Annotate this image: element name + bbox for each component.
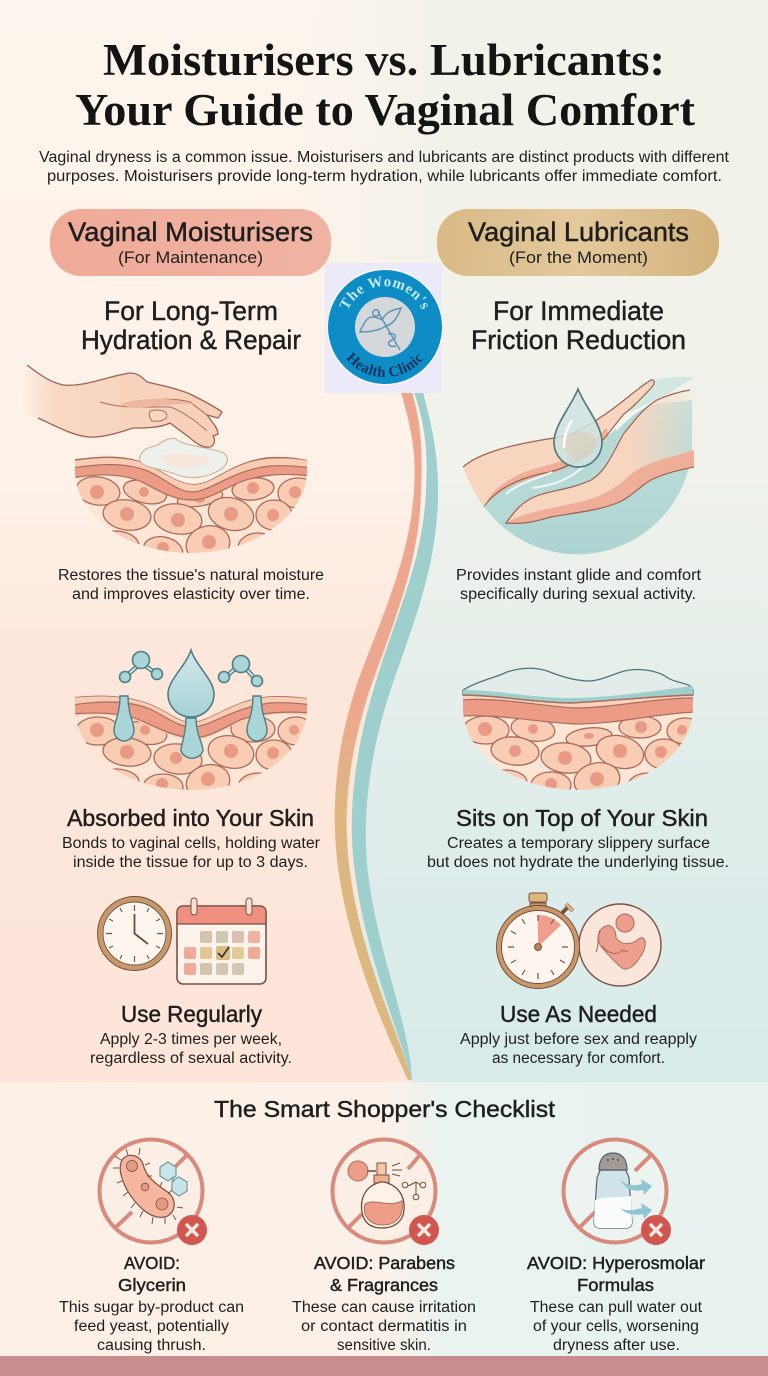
text: absorbed into your skin: inside the tissue for up to 3 days. [73, 854, 308, 871]
central ribbon: coral to gold [335, 392, 422, 1080]
logo: the women's health clinic [325, 263, 444, 393]
text: avoid glycerin [59, 1253, 244, 1354]
text: avoid parabens: & Fragrances [330, 1275, 438, 1295]
text: use as needed: Apply just before sex and reapply [460, 1031, 697, 1048]
text: sits on top of your skin: Sits on Top of Your Skin [456, 805, 708, 831]
intro text: Vaginal dryness is a common issue. Moisturisers and lubricants are distinct products with different [39, 149, 730, 166]
text: avoid hyperosmolar: Formulas [577, 1275, 654, 1295]
panel: moisturisers column [20, 209, 331, 1067]
text: avoid hyperosmolar [527, 1253, 705, 1354]
text: use regularly: regardless of sexual activity. [90, 1050, 292, 1067]
text: absorbed into your skin: Bonds to vaginal cells, holding water [62, 835, 320, 852]
text: sits on top of your skin: but does not hydrate the underlying tissue. [427, 854, 729, 871]
illustration: hand applying cream on skin [26, 364, 307, 553]
text: avoid hyperosmolar: These can pull water out [530, 1299, 703, 1316]
text: use as needed: as necessary for comfort. [492, 1050, 665, 1067]
checklist heading: The Smart Shopper's Checklist [214, 1096, 555, 1122]
lubricant film [463, 668, 693, 703]
text: avoid hyperosmolar: dryness after use. [553, 1337, 680, 1354]
text: avoid parabens: sensitive skin. [337, 1337, 431, 1354]
text: avoid glycerin: Glycerin [118, 1275, 186, 1295]
icon: clock [98, 896, 172, 970]
icon: calendar [177, 898, 266, 984]
text: use as needed [460, 1001, 697, 1067]
logo: the women's health clinic: Health Clinic [346, 352, 424, 378]
text: sits on top of your skin [427, 805, 729, 871]
caption: instant glide [456, 567, 702, 603]
central ribbon: teal [352, 392, 438, 1080]
illustration: lubricant film on top of skin [462, 668, 694, 790]
logo: the women's health clinic: The Women's [339, 276, 428, 310]
heading pill: vaginal moisturisers: (For Maintenance) [118, 249, 263, 267]
subheading: immediate friction reduction: For Immediate [493, 296, 664, 326]
icon: avoid glycerin [100, 1140, 207, 1245]
intro text: purposes. Moisturisers provide long-term hydration, while lubricants offer immediate comfort. [47, 168, 722, 185]
subheading: long-term hydration: Hydration & Repair [81, 325, 301, 355]
text: absorbed into your skin [62, 805, 320, 871]
title: Your Guide to Vaginal Comfort [75, 85, 695, 135]
hand [20, 365, 222, 447]
text: avoid glycerin: causing thrush. [97, 1337, 206, 1354]
text: sits on top of your skin: Creates a temporary slippery surface [447, 835, 710, 852]
text: avoid glycerin: AVOID: [124, 1253, 180, 1273]
heading pill: vaginal moisturisers: Vaginal Moisturisers [68, 217, 313, 247]
panel: smart shopper's checklist [59, 1096, 705, 1354]
heading pill: vaginal lubricants [437, 209, 719, 276]
text: avoid glycerin: This sugar by-product can [59, 1299, 244, 1316]
subheading: immediate friction reduction [471, 296, 686, 355]
intro text [39, 149, 730, 185]
text: avoid hyperosmolar: AVOID: Hyperosmolar [527, 1253, 705, 1273]
text: avoid parabens: These can cause irritation [292, 1299, 476, 1316]
text: use regularly [90, 1001, 292, 1067]
cream dollop [140, 438, 227, 478]
text: use as needed: Use As Needed [500, 1001, 657, 1027]
icon: stopwatch [496, 893, 580, 988]
caption: restores moisture: Restores the tissue's natural moisture [58, 567, 324, 584]
footer bar [0, 1356, 768, 1376]
illustration: lubricant between skin surfaces [463, 377, 707, 554]
illustration: water absorbed into skin [75, 648, 307, 790]
caption: instant glide: specifically during sexual activity. [460, 586, 696, 603]
text: avoid parabens: or contact dermatitis in [301, 1318, 467, 1335]
title: Moisturisers vs. Lubricants: [103, 35, 665, 85]
icon: intimacy circle [579, 904, 661, 986]
caption: restores moisture [58, 567, 324, 603]
icon: avoid parabens and fragrances [332, 1140, 439, 1245]
text: use regularly: Use Regularly [121, 1001, 262, 1027]
icon: avoid hyperosmolar formulas [564, 1140, 671, 1245]
subheading: long-term hydration [81, 296, 301, 355]
text: avoid parabens [292, 1253, 476, 1354]
title [75, 35, 695, 135]
subheading: immediate friction reduction: Friction Reduction [471, 325, 686, 355]
heading pill: vaginal lubricants: Vaginal Lubricants [468, 217, 689, 247]
heading pill: vaginal lubricants: (For the Moment) [509, 249, 648, 267]
text: avoid parabens: AVOID: Parabens [314, 1253, 455, 1273]
text: avoid hyperosmolar: of your cells, worsening [533, 1318, 699, 1335]
text: absorbed into your skin: Absorbed into Your Skin [67, 805, 314, 831]
heading pill: vaginal moisturisers [50, 209, 331, 276]
water drop [554, 389, 602, 467]
text: avoid glycerin: feed yeast, potentially [74, 1318, 229, 1335]
water drops and molecules [114, 650, 267, 758]
text: use regularly: Apply 2-3 times per week, [100, 1031, 282, 1048]
caption: restores moisture: and improves elasticity over time. [72, 586, 310, 603]
subheading: long-term hydration: For Long-Term [104, 296, 278, 326]
caption: instant glide: Provides instant glide and comfort [456, 567, 702, 584]
panel: lubricants column [427, 209, 729, 1067]
